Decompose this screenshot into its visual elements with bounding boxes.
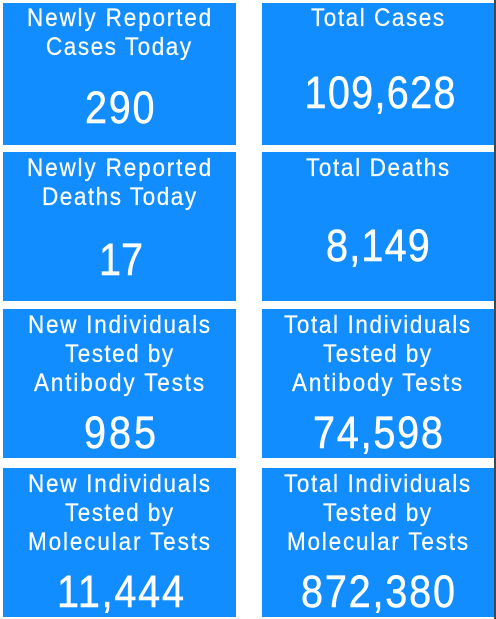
panel: total cases bbox=[262, 3, 494, 145]
panel: total individuals tested by molecular tests: Molecular Tests bbox=[287, 528, 468, 556]
panel: total individuals tested by antibody tests: Total Individuals bbox=[284, 311, 470, 339]
panel: total deaths bbox=[262, 152, 494, 301]
panel: new individuals tested by antibody tests: Antibody Tests bbox=[34, 369, 204, 397]
panel: total individuals tested by molecular tests: Total Individuals bbox=[284, 470, 470, 498]
panel: new individuals tested by antibody tests: Tested by bbox=[65, 340, 173, 368]
panel: total individuals tested by molecular tests bbox=[262, 468, 494, 617]
panel: new individuals tested by molecular tests: Molecular Tests bbox=[28, 528, 210, 556]
panel: total cases: Total Cases bbox=[311, 4, 444, 32]
panel: newly reported cases today bbox=[3, 3, 236, 145]
panel: newly reported deaths today: 17 bbox=[99, 235, 143, 285]
panel: new individuals tested by molecular tests: New Individuals bbox=[28, 470, 210, 498]
panel: total individuals tested by molecular tests: Tested by bbox=[323, 499, 431, 527]
panel: newly reported deaths today: Newly Reported bbox=[27, 154, 211, 182]
panel: newly reported deaths today: Deaths Today bbox=[42, 183, 196, 211]
panel: total deaths: Total Deaths bbox=[306, 154, 449, 182]
panel: newly reported cases today: 290 bbox=[85, 83, 155, 133]
panel: total individuals tested by antibody tests: Antibody Tests bbox=[292, 369, 462, 397]
panel: new individuals tested by antibody tests: 985 bbox=[84, 408, 156, 458]
panel: new individuals tested by molecular tests: 11,444 bbox=[57, 567, 184, 617]
panel: total individuals tested by antibody tests: 74,598 bbox=[313, 408, 443, 458]
panel: new individuals tested by molecular tests: Tested by bbox=[65, 499, 173, 527]
panel: total individuals tested by molecular tests: 872,380 bbox=[301, 567, 455, 617]
panel: new individuals tested by antibody tests bbox=[3, 309, 236, 458]
panel: newly reported deaths today bbox=[3, 152, 236, 301]
panel: new individuals tested by antibody tests: New Individuals bbox=[28, 311, 210, 339]
panel: newly reported cases today: Newly Reported bbox=[27, 4, 211, 32]
panel: total individuals tested by antibody tests: Tested by bbox=[323, 340, 431, 368]
panel: newly reported cases today: Cases Today bbox=[46, 33, 191, 61]
panel: total deaths: 8,149 bbox=[326, 221, 430, 271]
panel: total individuals tested by antibody tests bbox=[262, 309, 494, 458]
panel: new individuals tested by molecular tests bbox=[3, 468, 236, 617]
panel: total cases: 109,628 bbox=[304, 68, 455, 118]
